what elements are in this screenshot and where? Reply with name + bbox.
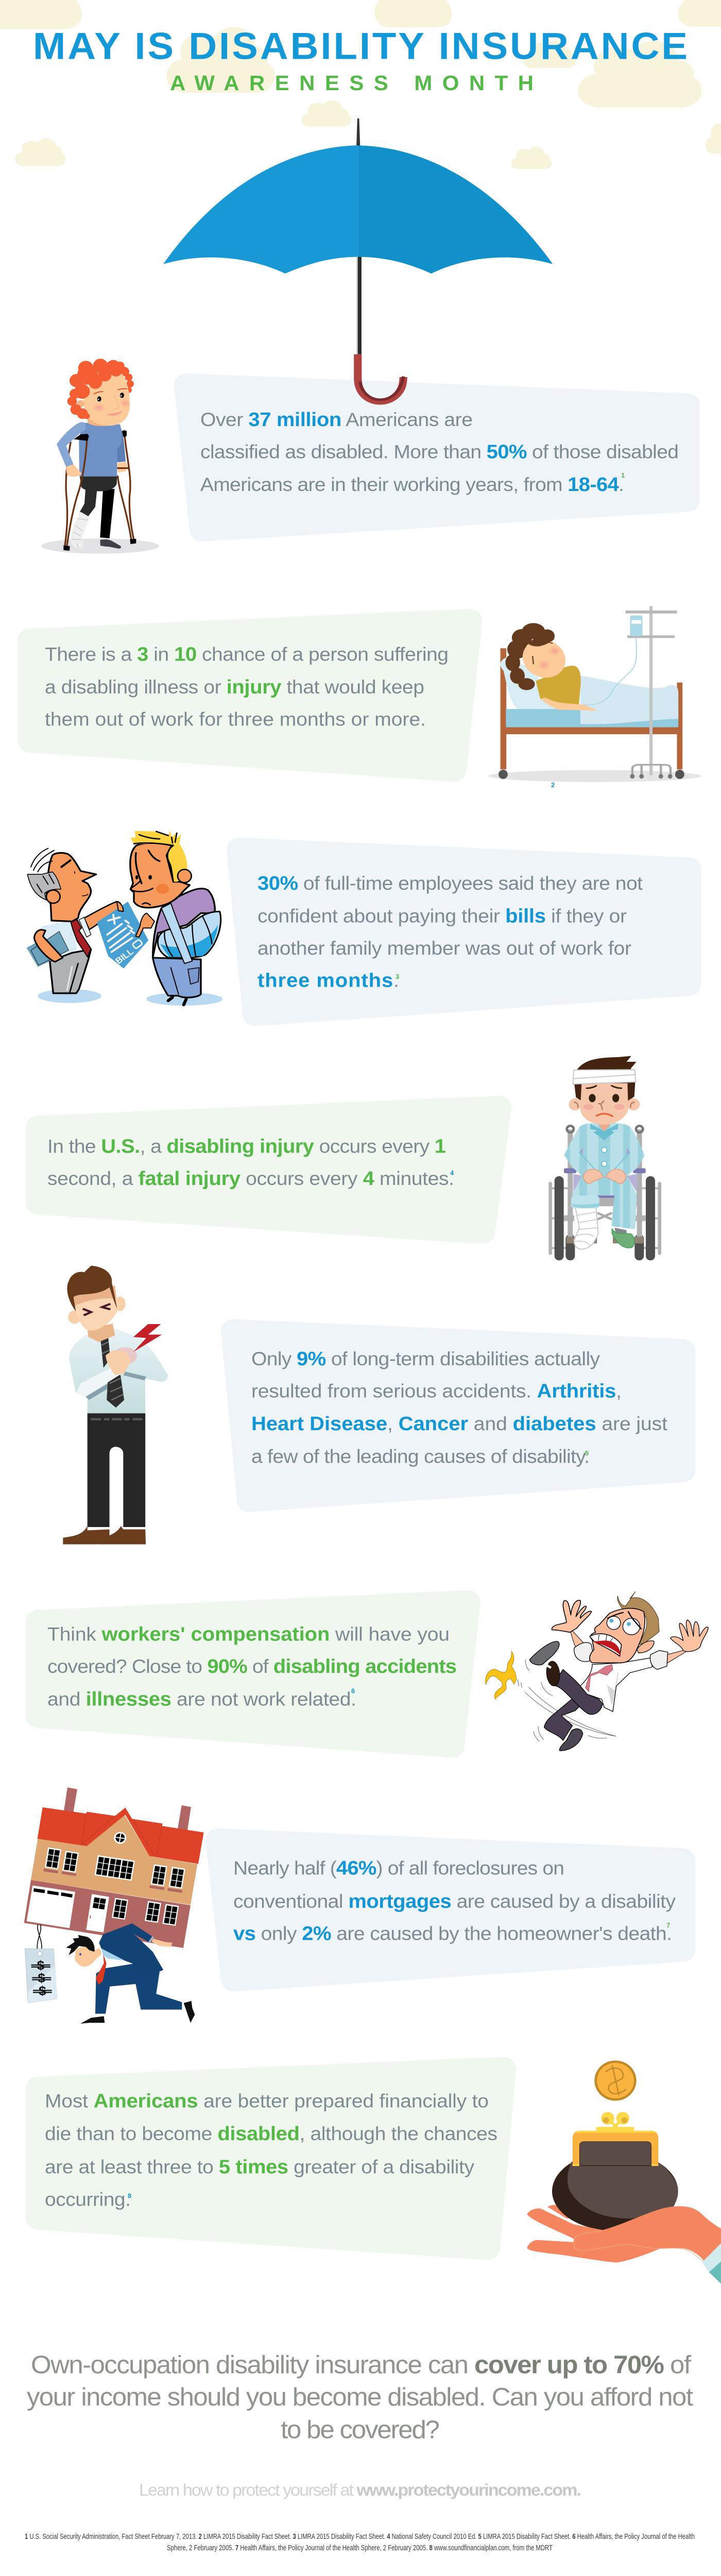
footnotes: Sphere, 2 February 2005. 7 Health Affairs, the Policy Journal of the Health Sphere, 2 February 2005. 8 www.soundfinancialplan.com, from the MDRT [167, 2544, 553, 2552]
panel: workers' compensation [38, 1602, 468, 1745]
call to action: Learn how to protect yourself at www.protectyourincome.com. [139, 2481, 581, 2500]
background clouds [0, 0, 721, 169]
panel: 9% serious accidents [233, 1331, 683, 1500]
panel: 30% of full-time employees: three months. [258, 969, 399, 991]
panel: 30% of full-time employees: another family member was out of work for [258, 938, 631, 959]
panel: 37 million Americans [186, 385, 688, 530]
panel: 37 million Americans: 1 [621, 471, 625, 479]
panel: 3 in 10 chance [30, 621, 470, 770]
illustration: man carrying a house with price tag: $ [38, 1971, 45, 1986]
panel: better prepared to die than to become disabled: Most Americans are better prepared financially to [45, 2090, 489, 2112]
panel: 3 in 10 chance: them out of work for three months or more. [45, 708, 426, 730]
panel: 30% of full-time employees: 3 [396, 973, 399, 980]
illustration: two men with a bill: BILL [114, 946, 135, 966]
closing statement [27, 2351, 693, 2444]
title: MAY IS DISABILITY INSURANCE [33, 25, 688, 67]
footnotes: 1 U.S. Social Security Administration, Fact Sheet February 7, 2013. 2 LIMRA 2015 Disability Fact Sheet. 3 LIMRA 2015 Disability Fact Sheet. 4 National Safety Council 2010 Ed. 5 LIMRA 2015 Disability Fact Sheet. 6 Health Affairs, the Policy Journal of the Health [25, 2533, 695, 2541]
illustration: man slipping on a banana peel [486, 1591, 708, 1751]
panel: disabling injury every second: In the U.S., a disabling injury occurs every 1 [47, 1135, 446, 1157]
panel: workers' compensation: covered? Close to 90% of disabling accidents [47, 1655, 457, 1677]
panel: 30% of full-time employees: confident about paying their bills if they or [258, 905, 627, 927]
panel: 3 in 10 chance: There is a 3 in 10 chance of a person suffering [45, 643, 449, 666]
panel: disabling injury every second: second, a fatal injury occurs every 4 minutes. [47, 1167, 454, 1190]
panel: foreclosures on mortgages: vs only 2% are caused by the homeowner's death. [233, 1922, 672, 1944]
footnote marker 2: 2 [551, 781, 555, 789]
panel: workers' compensation: and illnesses are not work related. [47, 1688, 356, 1710]
closing statement: Own-occupation disability insurance can cover up to 70% of [31, 2351, 691, 2379]
panel: foreclosures on mortgages [218, 1840, 683, 1979]
footnotes [25, 2533, 695, 2552]
closing statement: your income should you become disabled. Can you afford not [27, 2383, 693, 2411]
illustration: two men with a bill [27, 831, 222, 1006]
panel: 9% serious accidents: Heart Disease, Cancer and diabetes are just [251, 1413, 667, 1435]
panel: workers' compensation: Think workers' compensation will have you [47, 1623, 450, 1645]
panel: 30% of full-time employees: 30% of full-time employees said they are not [258, 872, 643, 894]
panel: better prepared to die than to become disabled: occurring. [45, 2189, 131, 2211]
panel: better prepared to die than to become disabled: 8 [128, 2192, 131, 2199]
illustration: hand holding coin purse [527, 2060, 721, 2284]
panel: foreclosures on mortgages: 7 [666, 1922, 670, 1929]
panel: foreclosures on mortgages: conventional mortgages are caused by a disability [233, 1890, 676, 1912]
panel: 37 million Americans: Americans are in their working years, from 18-64. [200, 473, 624, 496]
panel: better prepared to die than to become disabled: die than to become disabled, although the chances [45, 2123, 497, 2145]
panel: 9% serious accidents: 5 [585, 1449, 589, 1457]
illustration: woman on crutches [41, 359, 159, 554]
illustration: patient in hospital bed with IV [488, 606, 701, 782]
panel: 9% serious accidents: a few of the leading causes of disability. [251, 1446, 590, 1467]
panel: foreclosures on mortgages: Nearly half (46%) of all foreclosures on [233, 1857, 564, 1879]
closing statement: to be covered? [281, 2416, 440, 2444]
illustration: injured man in wheelchair [548, 1056, 661, 1260]
panel: 3 in 10 chance: a disabling illness or injury that would keep [45, 676, 424, 698]
panel: better prepared to die than to become disabled: are at least three to 5 times greater of a disability [45, 2156, 475, 2178]
panel: 9% serious accidents: resulted from serious accidents. Arthritis, [251, 1380, 622, 1402]
panel: 37 million Americans: classified as disabled. More than 50% of those disabled [200, 440, 679, 463]
illustration: man carrying a house with price tag [24, 1788, 204, 2024]
panel: disabling injury every second: 4 [450, 1169, 454, 1177]
illustration: man carrying a house with price tag: $ [39, 1984, 46, 1998]
panel: better prepared to die than to become disabled [38, 2069, 504, 2248]
illustration: man with chest pain [63, 1266, 168, 1544]
panel: disabling injury every second [38, 1108, 499, 1232]
panel: 37 million Americans: Over 37 million Americans are [200, 409, 473, 431]
panel: 9% serious accidents: Only 9% of long-term disabilities actually [251, 1348, 600, 1370]
illustration: man carrying a house with price tag: $ [37, 1958, 44, 1973]
subtitle: AWARENESS MONTH [170, 72, 534, 95]
panel: 30% of full-time employees [239, 850, 689, 1014]
panel: workers' compensation: 6 [351, 1687, 355, 1694]
icon: umbrella [163, 118, 553, 402]
